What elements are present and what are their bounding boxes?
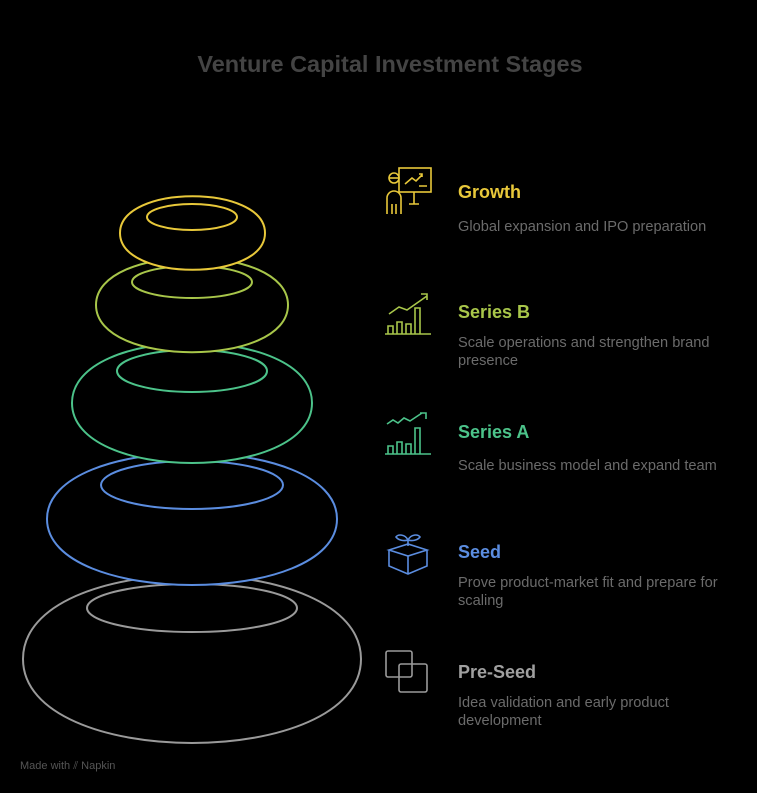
text: Scale business model and expand team [458, 458, 717, 474]
text: growth [458, 182, 706, 235]
text: pre-seed [458, 662, 669, 729]
icon: series b chart [385, 293, 431, 335]
ring: series b [96, 258, 288, 352]
footer: Made with ⫽ Napkin [20, 760, 115, 772]
text: Series B [458, 302, 530, 322]
icon: overlapping squares [385, 650, 428, 693]
icon: series a chart [385, 412, 431, 455]
ring: seed [47, 453, 337, 585]
title: Venture Capital Investment Stages [197, 51, 583, 77]
text: series b [458, 302, 710, 369]
text: Pre-Seed [458, 662, 536, 682]
text: Prove product-market fit and prepare for scaling [458, 575, 718, 609]
text: Series A [458, 422, 529, 442]
text: Global expansion and IPO preparation [458, 219, 706, 235]
ring: pre-seed [23, 575, 361, 743]
text: Scale operations and strengthen brand presence [458, 335, 710, 369]
ring: growth [120, 196, 265, 270]
icon: seed box [386, 534, 430, 575]
text: seed [458, 542, 718, 609]
ring: series a [72, 343, 312, 463]
text: Idea validation and early product development [458, 695, 669, 729]
text: Growth [458, 182, 521, 202]
text: series a [458, 422, 717, 474]
icon: presenter [386, 167, 432, 214]
text: Seed [458, 542, 501, 562]
